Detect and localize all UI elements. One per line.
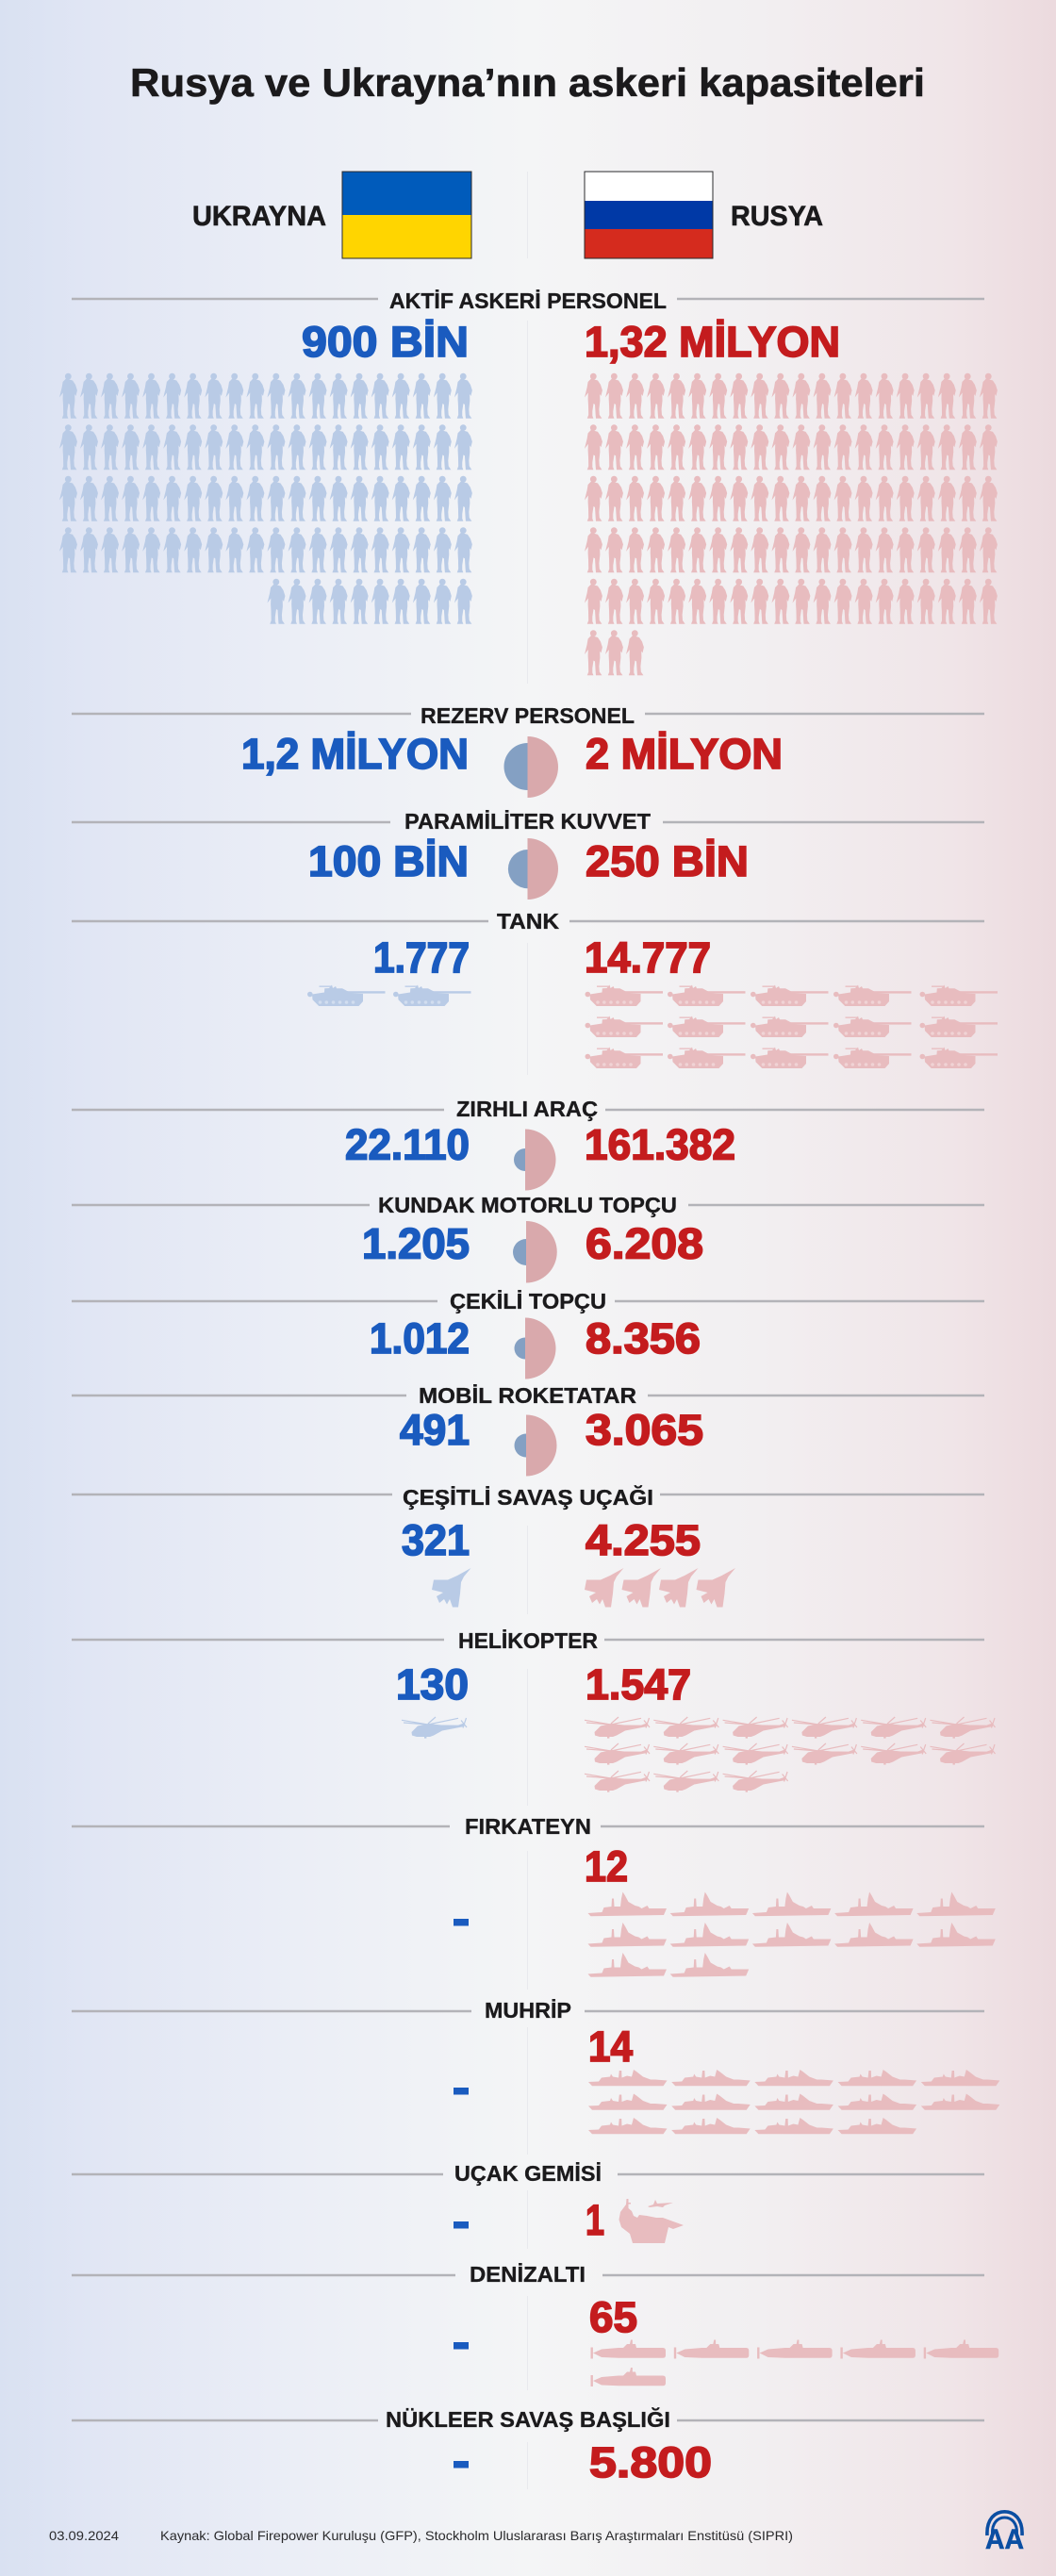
pictogram: Russia helicopters: [585, 1717, 996, 1792]
value: Russia: 1,32 MİLYON: [585, 318, 840, 366]
panel: nuclear warheads: [72, 2406, 984, 2486]
value: Russia: 14: [588, 2023, 633, 2071]
heading: DENİZALTI: [470, 2262, 586, 2287]
pictogram: Ukraine jet: [432, 1568, 471, 1607]
footer date: 03.09.2024: [49, 2528, 119, 2543]
panel: helicopters: [72, 1628, 996, 1792]
heading: MUHRİP: [485, 1998, 571, 2023]
value: Ukraine: 22.110: [345, 1120, 470, 1169]
value: Ukraine: 1.777: [373, 933, 470, 982]
flag: Russia: [585, 172, 713, 258]
pictogram: Ukraine soldiers: [59, 373, 472, 624]
panel: reserve personnel: [72, 703, 984, 798]
heading: HELİKOPTER: [458, 1628, 598, 1653]
footer source: Kaynak: Global Firepower Kuruluşu (GFP), Stockholm Uluslararası Barış Araştırmaları Enstitüsü (SIPRI): [160, 2528, 793, 2543]
panel: paramilitary force: [72, 809, 984, 900]
panel: active personnel: [59, 289, 998, 675]
panel: mobile rocket launchers: [72, 1383, 984, 1477]
value: Russia: 12: [585, 1842, 628, 1891]
value: Ukraine: 1.012: [370, 1314, 470, 1362]
panel: aircraft carrier: [72, 2161, 984, 2244]
value: Ukraine none: [454, 2221, 469, 2229]
heading: PARAMİLİTER KUVVET: [404, 809, 651, 834]
value: Ukraine none: [454, 2088, 469, 2095]
heading: AKTİF ASKERİ PERSONEL: [389, 289, 667, 313]
value: Ukraine: 130: [396, 1660, 469, 1709]
heading: MOBİL ROKETATAR: [419, 1383, 636, 1408]
panel: tanks: [72, 909, 998, 1068]
heading: NÜKLEER SAVAŞ BAŞLIĞI: [386, 2406, 670, 2432]
flag: Ukraine: [342, 172, 471, 258]
pictogram: Russia destroyers: [588, 2070, 999, 2134]
panel: self-propelled artillery: [72, 1193, 984, 1282]
semicircle comparison: [515, 1318, 556, 1379]
pictogram: Russia jets: [585, 1568, 735, 1607]
panel: combat aircraft: [72, 1484, 984, 1607]
value: Ukraine: 100 BİN: [308, 837, 469, 885]
icon: AA logo: AA: [985, 2524, 1024, 2555]
heading: REZERV PERSONEL: [421, 703, 635, 728]
pictogram: Russia submarines: [590, 2340, 998, 2386]
label: Ukrayna: UKRAYNA: [192, 201, 326, 232]
heading: UÇAK GEMİSİ: [454, 2161, 602, 2186]
semicircle comparison: [503, 736, 558, 798]
value: Ukraine: 1.205: [362, 1220, 470, 1267]
value: Ukraine: 1,2 MİLYON: [241, 730, 469, 778]
value: Russia: 14.777: [585, 933, 711, 982]
value: Ukraine: 491: [400, 1406, 470, 1454]
value: Ukraine none: [454, 1919, 469, 1925]
value: Russia: 1: [586, 2196, 604, 2244]
label: Rusya: RUSYA: [731, 201, 823, 232]
value: Ukraine: 321: [402, 1516, 470, 1564]
semicircle comparison: [513, 1221, 557, 1282]
title: Rusya ve Ukrayna’nın askeri kapasiteleri: [130, 60, 925, 105]
pictogram: Ukraine helicopter: [402, 1717, 467, 1739]
value: Russia: 4.255: [586, 1516, 701, 1564]
country header: [192, 172, 823, 258]
value: Russia: 3.065: [586, 1406, 703, 1454]
value: Ukraine: 900 BİN: [302, 318, 469, 366]
heading: KUNDAK MOTORLU TOPÇU: [378, 1193, 677, 1217]
panel: armored vehicles: [72, 1097, 984, 1190]
heading: ZIRHLI ARAÇ: [456, 1097, 598, 1121]
icon: aircraft carrier: [619, 2199, 684, 2243]
value: Russia: 250 BİN: [586, 837, 749, 885]
pictogram: Russia frigates: [588, 1891, 996, 1977]
value: Russia: 2 MİLYON: [586, 730, 783, 778]
heading: ÇEKİLİ TOPÇU: [450, 1289, 606, 1313]
semicircle comparison: [514, 1130, 556, 1190]
panel: destroyers: [72, 1998, 999, 2134]
pictogram: Ukraine tanks: [307, 984, 471, 1006]
panel: towed artillery: [72, 1289, 984, 1379]
value: Russia: 6.208: [586, 1220, 703, 1267]
pictogram: Russia soldiers: [585, 373, 998, 675]
value: Russia: 8.356: [586, 1314, 701, 1362]
value: Ukraine none: [454, 2461, 469, 2469]
value: Russia: 5.800: [589, 2438, 712, 2486]
heading: FIRKATEYN: [465, 1814, 591, 1839]
pictogram: Russia tanks: [585, 984, 998, 1068]
icon: AA logo: [985, 2512, 1024, 2555]
semicircle comparison: [515, 1414, 556, 1477]
heading: TANK: [497, 909, 559, 933]
value: Russia: 161.382: [585, 1120, 735, 1169]
panel: frigates: [72, 1814, 996, 1977]
value: Ukraine none: [454, 2342, 469, 2350]
semicircle comparison: [508, 838, 558, 900]
value: Russia: 65: [589, 2293, 637, 2341]
heading: ÇEŞİTLİ SAVAŞ UÇAĞI: [403, 1484, 653, 1510]
panel: submarines: [72, 2262, 998, 2386]
value: Russia: 1.547: [586, 1660, 691, 1709]
